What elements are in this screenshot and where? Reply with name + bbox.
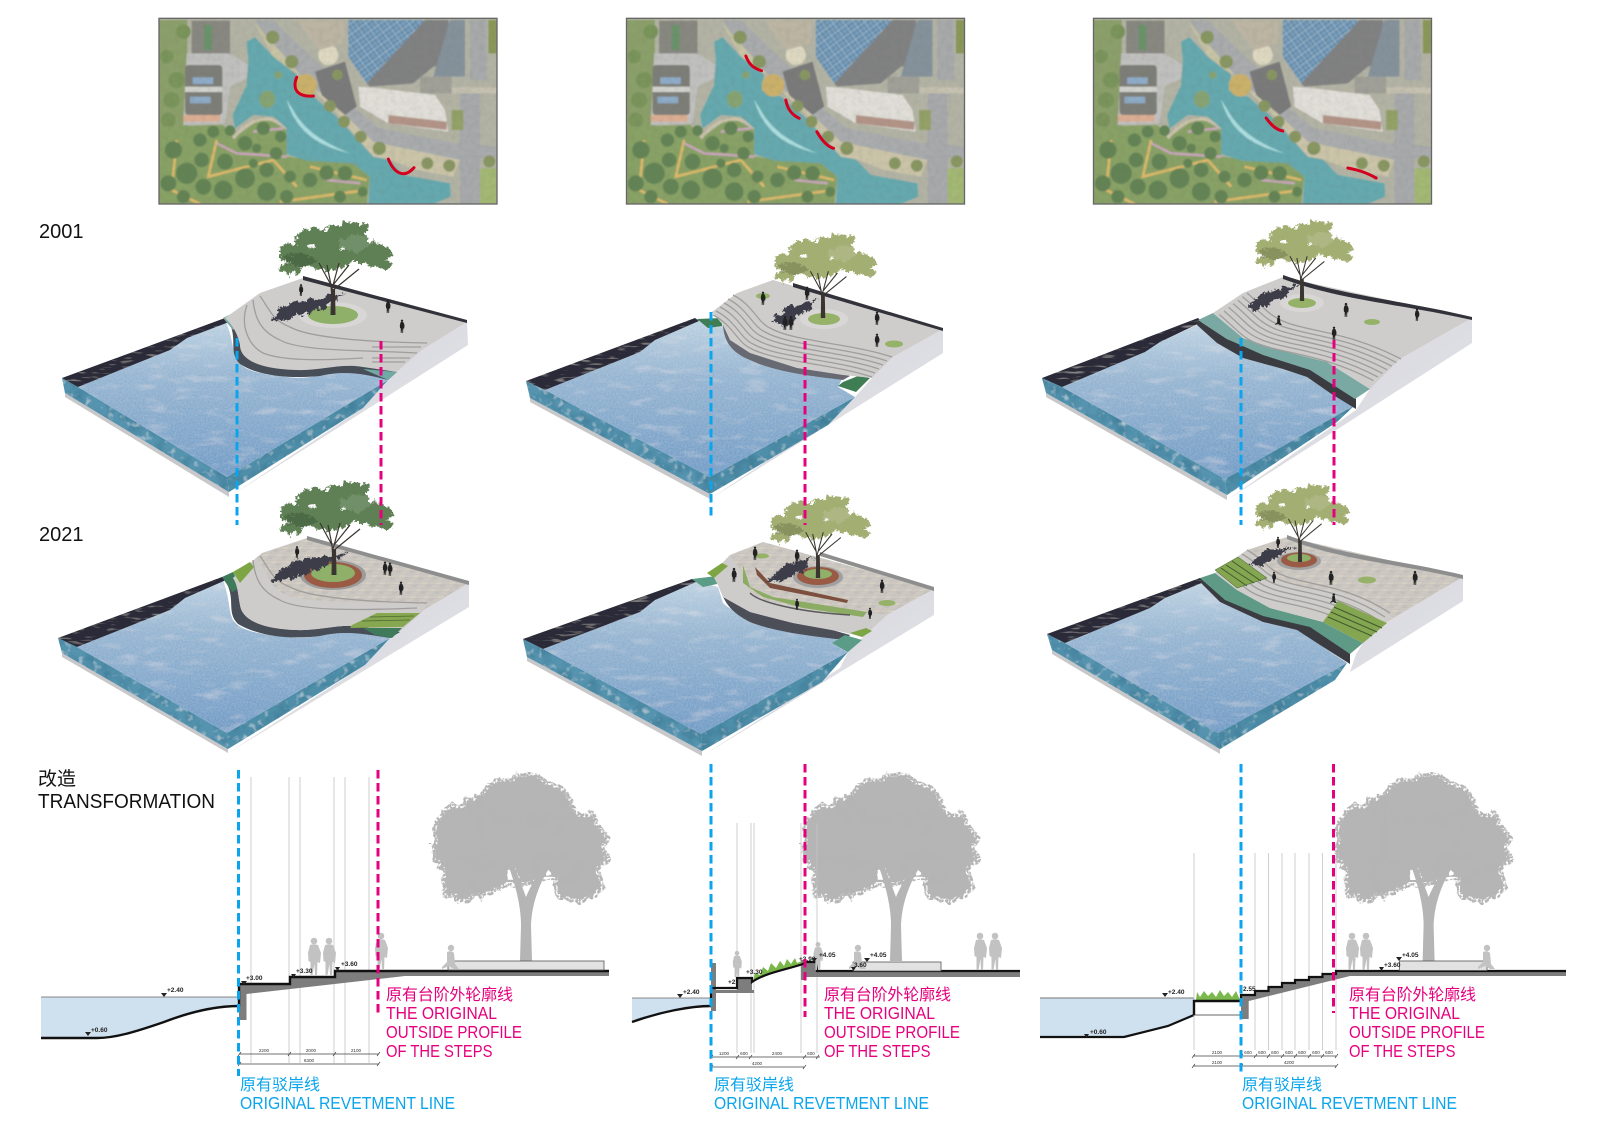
level labels: +2. xyxy=(728,979,737,986)
level labels: +2.40 xyxy=(1168,989,1185,996)
land surface xyxy=(1215,537,1463,643)
dimension lines: 6300 xyxy=(304,1058,315,1063)
blue dashed line, section 1 xyxy=(237,770,240,1076)
magenta callout 2: OUTSIDE PROFILE xyxy=(824,1022,960,1042)
grass xyxy=(1196,990,1240,1000)
level labels: 2.55 xyxy=(1243,986,1256,993)
dimension lines: 4200 xyxy=(1284,1060,1295,1065)
level labels xyxy=(85,961,358,1036)
3D block: 2001 middle xyxy=(526,234,943,499)
level labels: +3.30 xyxy=(296,968,313,975)
dimension lines: 600 xyxy=(1258,1050,1266,1055)
tree xyxy=(774,234,876,318)
dimension lines: 4200 xyxy=(752,1061,763,1066)
water xyxy=(1040,998,1194,1037)
magenta dashed line, section 1 xyxy=(376,770,380,1017)
heading: transformation: 改造 xyxy=(38,768,76,790)
level labels: +4.05 xyxy=(1402,952,1419,959)
section 3 xyxy=(1040,774,1566,1068)
level labels: +3.30 xyxy=(746,969,763,976)
dimension lines: 2400 xyxy=(772,1051,783,1056)
dimension lines: 600 xyxy=(1325,1050,1333,1055)
dimension lines: 2100 xyxy=(351,1048,362,1053)
blue callout 1: 原有驳岸线 xyxy=(240,1076,320,1094)
tree xyxy=(280,482,393,575)
dimension lines: 2100 xyxy=(1212,1050,1223,1055)
blue dashed line, right blocks xyxy=(1240,338,1242,525)
level labels: +2.40 xyxy=(167,987,184,994)
land surface xyxy=(233,538,469,632)
dimension lines xyxy=(1192,1050,1338,1068)
tree silhouette xyxy=(802,774,979,961)
blue callout 2: 原有驳岸线 xyxy=(714,1076,794,1094)
magenta callout 1: THE ORIGINAL xyxy=(386,1003,497,1023)
3D block: 2021 right xyxy=(1047,485,1463,754)
site plan map 1 xyxy=(159,18,497,204)
magenta callout 2: THE ORIGINAL xyxy=(824,1003,935,1023)
dimension lines xyxy=(238,1048,380,1066)
3D block: 2021 middle xyxy=(523,496,934,756)
dimension lines: 600 xyxy=(1285,1050,1293,1055)
red highlighted edges 1 xyxy=(295,77,414,174)
level labels: +4.05 xyxy=(819,952,836,959)
3D block: 2021 left xyxy=(58,482,469,753)
magenta dashed line, section 3 xyxy=(1332,764,1335,1013)
section 1 xyxy=(41,774,609,1066)
water xyxy=(41,997,239,1038)
magenta callout 1: OUTSIDE PROFILE xyxy=(386,1022,522,1042)
magenta dashed line, right blocks xyxy=(1332,340,1336,525)
magenta callout 2: 原有台阶外轮廓线 xyxy=(824,986,951,1004)
blue dashed line, section 2 xyxy=(710,764,712,1076)
level labels: +0.60 xyxy=(1090,1029,1107,1036)
teal platform xyxy=(1198,313,1370,399)
magenta callout 2: OF THE STEPS xyxy=(824,1041,930,1061)
level labels: +3.60 xyxy=(1384,962,1401,969)
land surface xyxy=(712,542,934,637)
level labels: 3.60 xyxy=(854,962,867,969)
magenta callout 3: THE ORIGINAL xyxy=(1349,1003,1460,1023)
magenta callout 1: OF THE STEPS xyxy=(386,1041,492,1061)
magenta callout 3: OF THE STEPS xyxy=(1349,1041,1456,1061)
dimension lines: 600 xyxy=(807,1051,815,1056)
tree xyxy=(770,496,870,578)
dimension lines xyxy=(710,1051,820,1069)
dimension lines: 2200 xyxy=(259,1048,270,1053)
3D block: 2001 left xyxy=(62,222,468,497)
level labels: +3.00 xyxy=(246,975,263,982)
site plan map 3 xyxy=(1093,18,1431,204)
red highlighted edges 3 xyxy=(1266,118,1376,178)
dimension lines: 600 xyxy=(1244,1050,1252,1055)
level labels: +3.60 xyxy=(341,961,358,968)
grass xyxy=(753,958,802,982)
level labels: +4.05 xyxy=(870,952,887,959)
dimension lines: 2100 xyxy=(1212,1060,1223,1065)
level labels xyxy=(677,952,887,998)
tree xyxy=(279,222,392,315)
magenta callout 1: 原有台阶外轮廓线 xyxy=(386,986,513,1004)
tree xyxy=(1255,485,1349,562)
heading: 2021: 2021 xyxy=(39,524,84,546)
dimension lines: 600 xyxy=(740,1051,748,1056)
level labels: +3.90 xyxy=(799,956,816,963)
magenta dashed line, section 2 xyxy=(804,764,806,1017)
blue callout 3: 原有驳岸线 xyxy=(1242,1076,1322,1094)
land surface xyxy=(712,280,943,378)
heading: transformation: TRANSFORMATION xyxy=(38,791,215,813)
dimension lines: 600 xyxy=(1271,1050,1279,1055)
revetment wall xyxy=(1200,578,1350,664)
red highlighted edges 2 xyxy=(746,56,833,148)
section 2 xyxy=(632,774,1020,1069)
site plan map 2 xyxy=(626,18,964,204)
blue callout 1: ORIGINAL REVETMENT LINE xyxy=(240,1093,455,1113)
water xyxy=(632,998,711,1022)
tree silhouette xyxy=(1335,774,1512,961)
dimension lines: 600 xyxy=(1312,1050,1320,1055)
level labels: +2.40 xyxy=(683,989,700,996)
magenta callout 3: 原有台阶外轮廓线 xyxy=(1349,986,1476,1004)
blue dashed line, middle blocks xyxy=(710,312,712,519)
dimension lines: 600 xyxy=(1298,1050,1306,1055)
revetment wall xyxy=(1197,320,1356,409)
tree silhouette xyxy=(432,774,609,961)
land surface xyxy=(225,278,467,372)
dimension lines: 2000 xyxy=(306,1048,317,1053)
land surface xyxy=(1213,277,1472,389)
3D block: 2001 right xyxy=(1042,221,1472,500)
blue dashed line, left blocks xyxy=(236,338,238,525)
tree xyxy=(1256,221,1353,301)
teal platform xyxy=(1200,573,1363,654)
magenta dashed line, middle blocks xyxy=(804,341,806,525)
level labels xyxy=(1084,952,1419,1038)
blue dashed line, section 3 xyxy=(1240,764,1242,1073)
heading: 2001: 2001 xyxy=(39,221,84,243)
magenta callout 3: OUTSIDE PROFILE xyxy=(1349,1022,1485,1042)
dimension lines: 1200 xyxy=(719,1051,730,1056)
blue callout 2: ORIGINAL REVETMENT LINE xyxy=(714,1093,929,1113)
blue callout 3: ORIGINAL REVETMENT LINE xyxy=(1242,1093,1457,1113)
green stairs xyxy=(1215,557,1267,588)
magenta dashed line, left blocks xyxy=(380,341,382,525)
level labels: +0.60 xyxy=(91,1027,108,1034)
